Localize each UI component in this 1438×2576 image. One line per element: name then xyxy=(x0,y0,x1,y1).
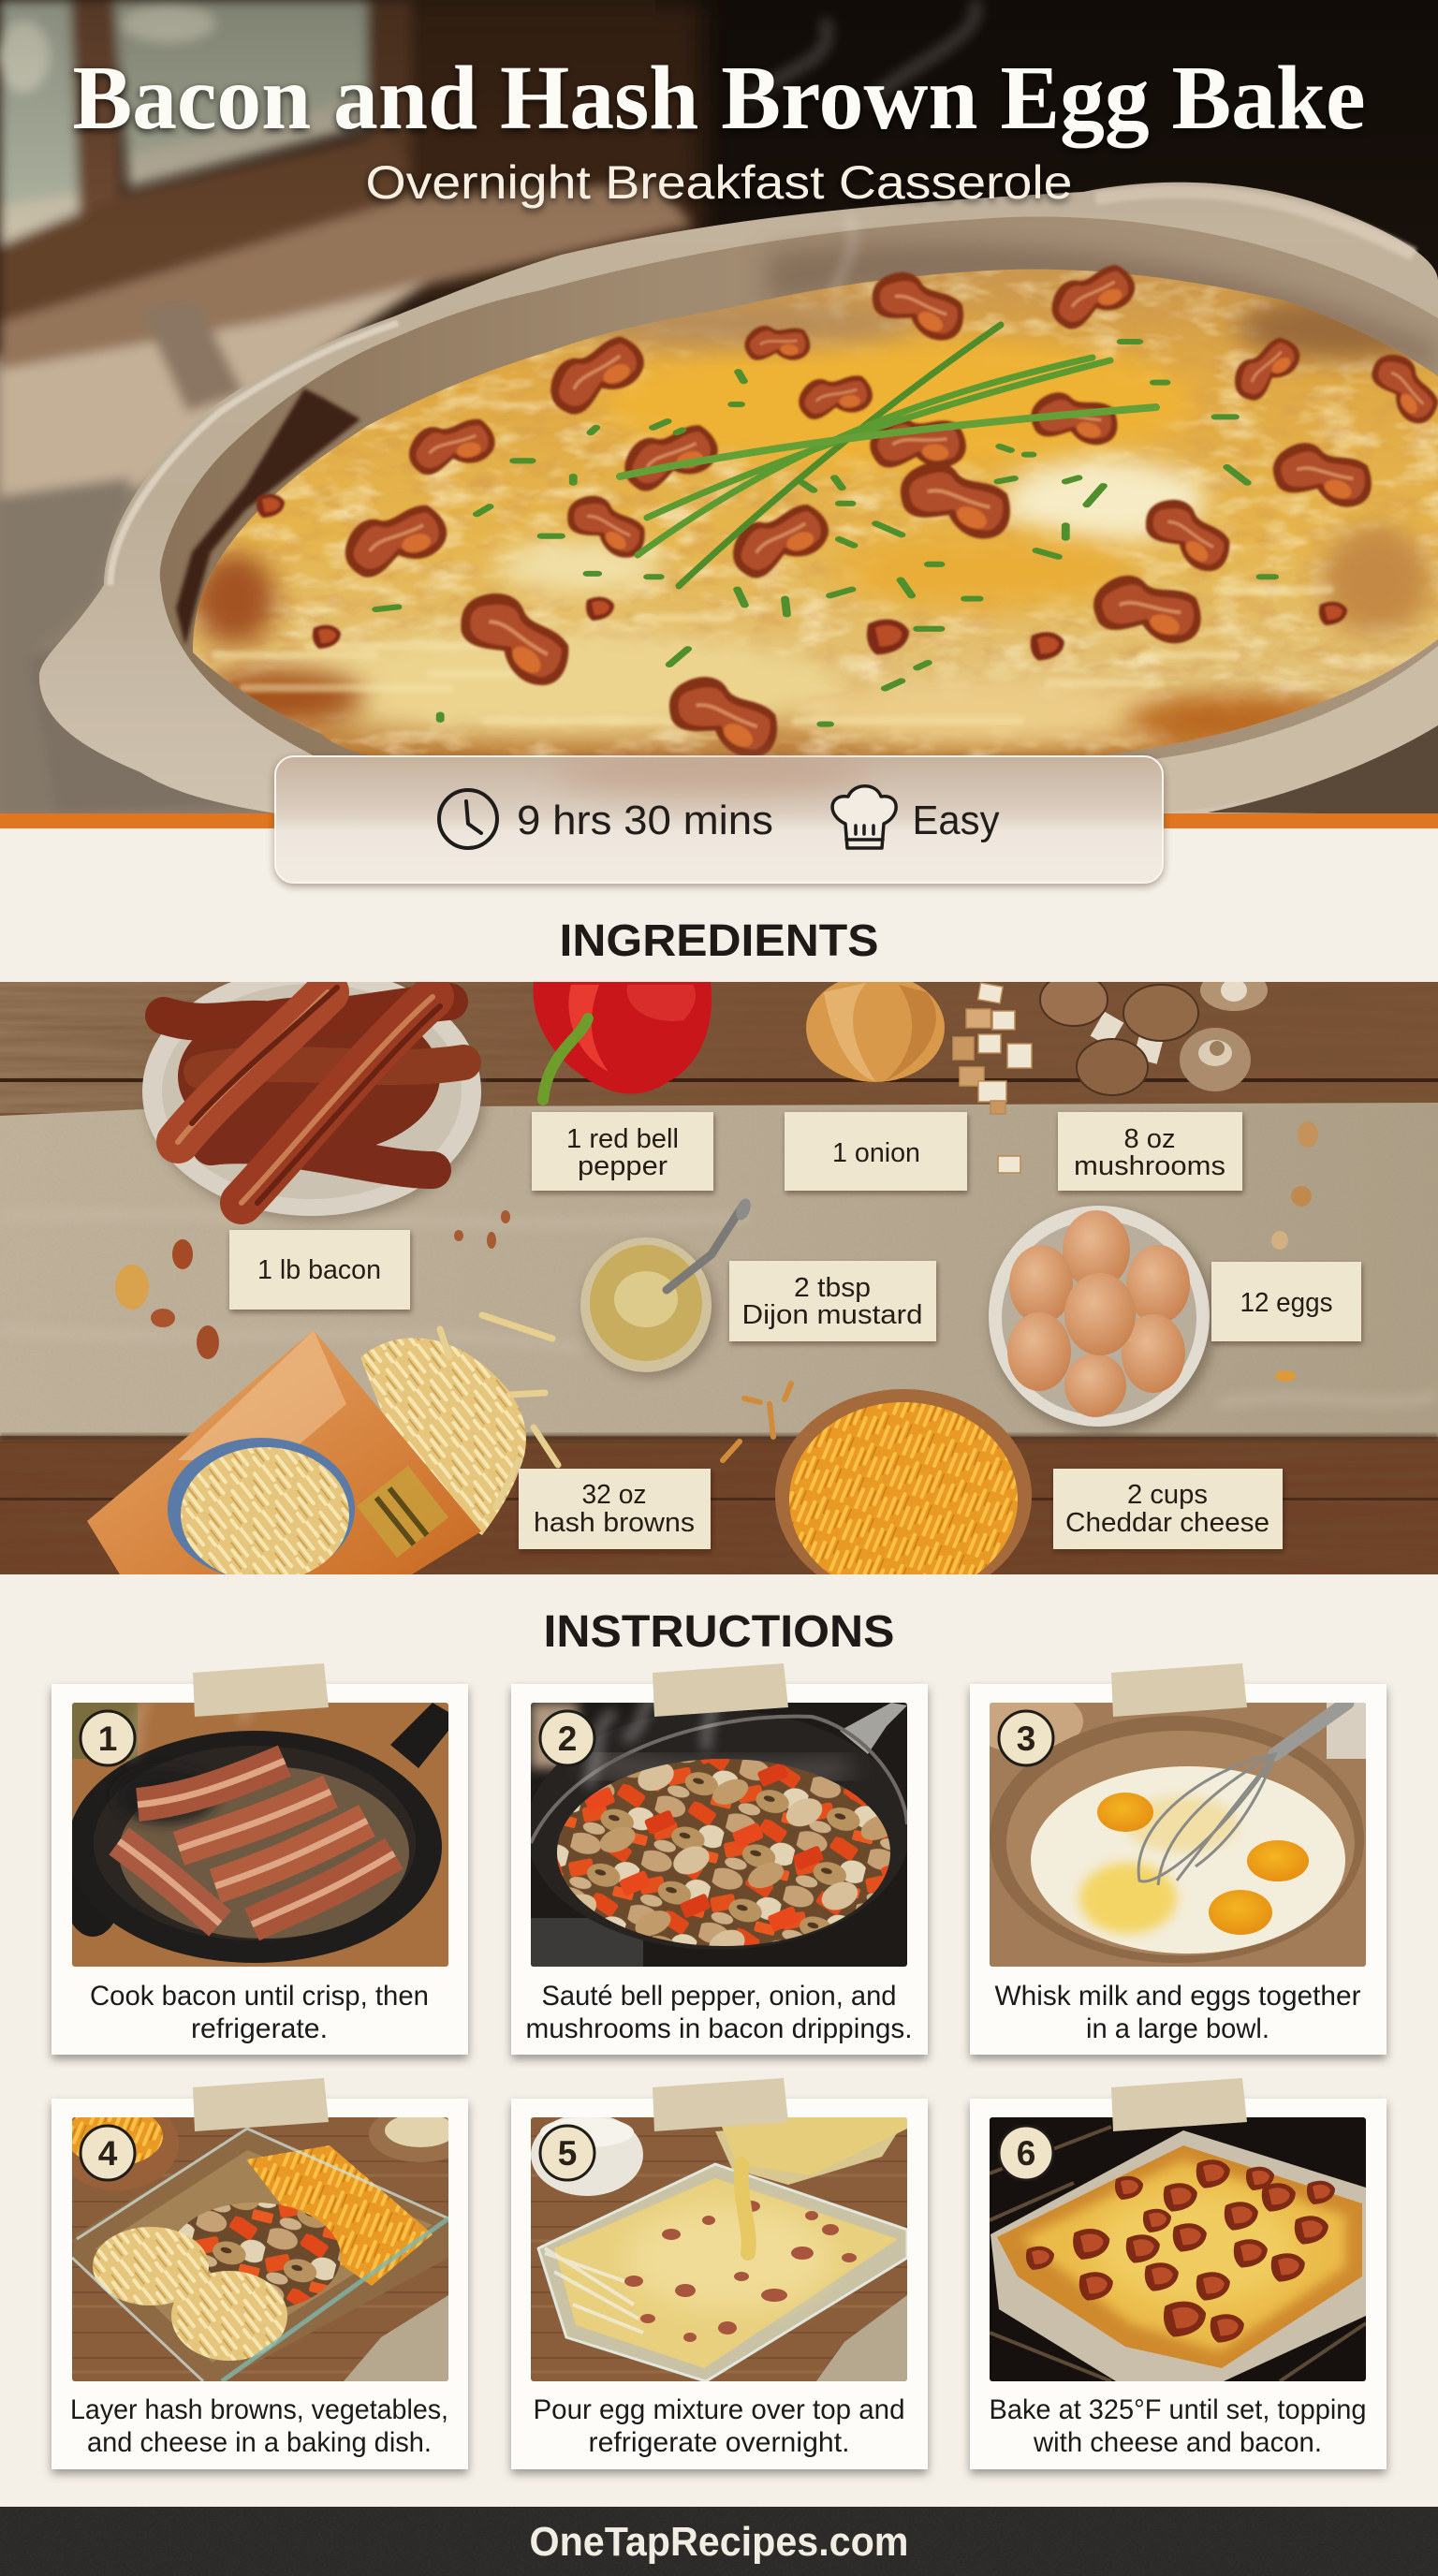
step 6 text: with cheese and bacon. xyxy=(1033,2427,1322,2458)
chive sprig xyxy=(620,325,1156,586)
badge: 3: 3 xyxy=(1017,1720,1035,1758)
chopped onion xyxy=(953,983,1032,1173)
step 3 text xyxy=(994,1981,1361,2044)
window and table backdrop xyxy=(0,0,693,833)
linen runner xyxy=(0,1103,1438,1442)
step 2 text xyxy=(526,1981,912,2044)
step 4 text: Layer hash browns, vegetables, xyxy=(70,2394,448,2425)
badge: 4 xyxy=(81,2126,135,2180)
label: 8 oz mushrooms xyxy=(1058,1112,1242,1191)
badge: 6 xyxy=(999,2126,1053,2180)
step 1 photo: bacon in skillet xyxy=(65,1684,448,1967)
badge: 2: 2 xyxy=(558,1720,577,1758)
badge: 5 xyxy=(540,2126,594,2180)
label: 2 tbsp Dijon mustard xyxy=(729,1261,936,1341)
bag of hash browns xyxy=(87,1315,558,1582)
scattered crumbs xyxy=(115,1121,1318,1460)
label: 2 cups Cheddar cheese: Cheddar cheese xyxy=(1065,1508,1269,1538)
step 3 photo: whisking eggs xyxy=(971,1689,1366,1967)
label: 2 tbsp Dijon mustard: Dijon mustard xyxy=(741,1300,923,1330)
step 2 text: Sauté bell pepper, onion, and xyxy=(541,1981,897,2012)
bowl of shredded cheddar xyxy=(775,1389,1032,1603)
step 3 card xyxy=(970,1663,1387,2055)
red bell pepper xyxy=(534,982,712,1100)
egg bowl xyxy=(989,1206,1215,1434)
step 6 text xyxy=(989,2394,1367,2458)
step 4 card xyxy=(51,2078,472,2469)
step 3 text: Whisk milk and eggs together xyxy=(994,1981,1361,2012)
step 5 text: Pour egg mixture over top and xyxy=(534,2394,904,2425)
casserole food xyxy=(187,260,1438,772)
label: 1 red bell pepper: pepper xyxy=(578,1151,668,1181)
tape xyxy=(193,2078,329,2131)
difficulty text: Easy xyxy=(912,798,1000,843)
steam xyxy=(749,0,976,318)
panel: ingredients flat lay xyxy=(0,967,1438,1603)
step 2 text: mushrooms in bacon drippings. xyxy=(526,2013,912,2044)
subtitle: Overnight Breakfast Casserole xyxy=(365,156,1073,209)
step 5 text xyxy=(534,2394,904,2458)
label: 32 oz hash browns: hash browns xyxy=(534,1508,695,1538)
bacon plate xyxy=(142,967,485,1222)
step 6 photo: baked casserole in oven xyxy=(990,2117,1366,2381)
step 1 text xyxy=(90,1981,429,2044)
badge: 4: 4 xyxy=(98,2134,118,2173)
step 5 photo: pouring egg mixture xyxy=(531,2114,907,2381)
label: 8 oz mushrooms: mushrooms xyxy=(1074,1151,1225,1181)
badge: 5: 5 xyxy=(558,2134,577,2173)
tape xyxy=(653,1663,788,1717)
step 3 text: in a large bowl. xyxy=(1086,2013,1269,2044)
label: 1 lb bacon: 1 lb bacon xyxy=(257,1255,381,1285)
badge: 6: 6 xyxy=(1017,2134,1035,2173)
label: 2 cups Cheddar cheese xyxy=(1053,1469,1283,1549)
label: 2 cups Cheddar cheese: 2 cups xyxy=(1127,1480,1208,1510)
bacon pieces xyxy=(257,260,1438,772)
icon: chef hat xyxy=(832,786,896,848)
label: 1 lb bacon xyxy=(229,1230,410,1310)
step 6 text: Bake at 325°F until set, topping xyxy=(989,2394,1367,2425)
step 1 text: Cook bacon until crisp, then xyxy=(90,1981,429,2012)
badge: 1: 1 xyxy=(98,1720,117,1758)
step 5 card xyxy=(511,2078,928,2469)
step 2 photo: sauteed vegetables xyxy=(526,1693,910,1967)
baking dish xyxy=(39,183,1438,814)
mushrooms xyxy=(1040,970,1268,1095)
icon: clock xyxy=(439,790,497,848)
step 4 text xyxy=(70,2394,448,2458)
heading: instructions: INSTRUCTIONS xyxy=(543,1607,895,1657)
time text: 9 hrs 30 mins xyxy=(517,798,773,843)
label: 12 eggs xyxy=(1211,1262,1361,1341)
time and difficulty pill xyxy=(275,756,1163,883)
heading: ingredients: INGREDIENTS xyxy=(560,916,878,966)
step 5 text: refrigerate overnight. xyxy=(588,2427,850,2458)
footer bar xyxy=(0,2507,1438,2576)
label: 1 onion xyxy=(785,1112,967,1191)
step 6 card xyxy=(970,2078,1387,2469)
title: Bacon and Hash Brown Egg Bake xyxy=(73,48,1365,149)
tape xyxy=(193,1663,329,1717)
hero photo: casserole in baking dish xyxy=(0,0,1438,833)
wood table xyxy=(0,982,1438,1574)
tape xyxy=(1111,1663,1247,1717)
label: 1 red bell pepper xyxy=(532,1112,713,1191)
onion xyxy=(806,973,945,1082)
badge: 1 xyxy=(81,1711,135,1765)
label: 1 red bell pepper: 1 red bell xyxy=(566,1124,679,1154)
step 4 text: and cheese in a baking dish. xyxy=(87,2427,432,2458)
label: 1 onion: 1 onion xyxy=(832,1138,920,1168)
badge: 3 xyxy=(999,1711,1053,1765)
mustard jar xyxy=(580,1196,754,1378)
orange divider band xyxy=(0,813,1438,828)
step 2 card xyxy=(511,1663,928,2055)
label: 32 oz hash browns: 32 oz xyxy=(582,1480,646,1510)
step 1 text: refrigerate. xyxy=(191,2013,328,2044)
label: 12 eggs: 12 eggs xyxy=(1240,1288,1333,1318)
label: 32 oz hash browns xyxy=(519,1469,711,1549)
badge: 2 xyxy=(540,1711,594,1765)
chive pieces xyxy=(376,342,1275,724)
step 4 photo: layering casserole xyxy=(55,2097,472,2381)
tape xyxy=(1111,2078,1247,2131)
step 1 card xyxy=(51,1663,468,2055)
label: 8 oz mushrooms: 8 oz xyxy=(1123,1124,1176,1154)
label: 2 tbsp Dijon mustard: 2 tbsp xyxy=(794,1273,871,1303)
tape xyxy=(653,2078,788,2131)
footer text: OneTapRecipes.com xyxy=(530,2519,908,2565)
